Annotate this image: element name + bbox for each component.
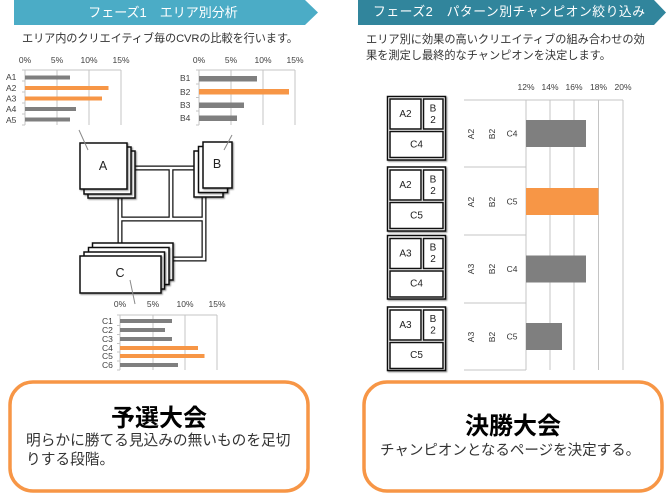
combination card: A3 B2 C4: A3 [399,248,412,260]
connector pipes between areas [120,168,204,259]
bar group: A3 B2 C4 [466,256,586,282]
bar chart: area A: A1 [6,72,17,82]
bar chart: area B: 15% [286,55,304,65]
creative stack A [80,143,135,198]
leader line: stack C to chart C [130,280,135,304]
bar chart: area A: 0% [19,55,32,65]
description: phase 2 [366,32,645,62]
combination card: A3 B2 C5: C5 [410,350,423,361]
bar chart: area C: C6 [102,360,113,370]
callout: preliminary round: りする段階。 [26,451,114,468]
combination card: A2 B2 C5 [388,167,446,231]
bar chart: area B: B2 [180,87,191,97]
bar chart: area A: A2 [6,83,17,93]
bar chart: area A: A5 [6,115,17,125]
bar group: A2 B2 C4 [466,120,586,147]
bar group: A3 B2 C5: B2 [487,332,497,342]
bar chart: area B: 0% [193,55,206,65]
creative stack C [80,243,173,293]
bar chart: area C: C5 [102,351,113,361]
bar chart: area C: C1 [102,316,113,326]
bar group: A2 B2 C5: C5 [507,196,518,206]
callout: preliminary round: 予選大会 [111,405,207,432]
bar chart: area C [102,299,226,370]
combination card: A3 B2 C4 [388,236,446,299]
combination card: A2 B2 C5: B [430,174,437,186]
bar group: A2 B2 C4: C4 [507,128,518,138]
bar group: A3 B2 C5 [466,323,562,350]
combination card: A3 B2 C4: B [430,242,437,254]
bar chart: area A: A3 [6,94,17,104]
combination card: A2 B2 C4 [388,96,446,160]
bar group: A2 B2 C5 [466,188,598,215]
bar chart: area A: 5% [51,55,64,65]
bar chart: pattern comparison: 14% [541,82,559,92]
bar group: A2 B2 C4: A2 [466,129,476,139]
bar group: A3 B2 C4: B2 [487,264,497,274]
description: phase 1: エリア内のクリエイティブ毎のCVRの比較を行います。 [22,31,298,45]
bar chart: area A: 15% [112,55,130,65]
header arrow: phase 1: フェーズ1 エリア別分析 [88,5,238,20]
bar chart: area B [180,55,304,125]
bar chart: area B: B4 [180,113,191,123]
combination card: A3 B2 C5 [388,307,446,370]
combination card: A3 B2 C5: A3 [399,320,412,331]
bar chart: area B: 5% [225,55,238,65]
creative stack B [194,142,232,197]
description: phase 2: エリア別に効果の高いクリエイティブの組み合わせの効 [366,32,645,46]
bar chart: pattern comparison: 16% [565,82,583,92]
bar chart: pattern comparison: 20% [614,82,632,92]
combination card: A3 B2 C4: C4 [410,278,423,290]
bar group: A2 B2 C5: B2 [487,197,497,207]
callout: preliminary round: 明らかに勝てる見込みの無いものを足切 [26,432,290,449]
bar group: A2 B2 C5: A2 [466,197,476,207]
bar chart: area B: 10% [254,55,272,65]
bar group: A3 B2 C4: C4 [507,264,518,274]
callout: final round [364,382,662,491]
header arrow: phase 1 [14,0,318,25]
combination card: A2 B2 C4: C4 [410,140,423,150]
callout: final round: チャンピオンとなるページを決定する。 [380,442,640,459]
bar chart: area A: A4 [6,104,17,114]
combination card: A2 B2 C5: 2 [430,186,436,197]
bar chart: area C: 15% [208,299,226,309]
callout: preliminary round [10,382,308,491]
bar chart: area A: 10% [80,55,98,65]
creative stack B: B [213,157,221,171]
combination card: A2 B2 C5: C5 [410,210,423,222]
bar group: A3 B2 C4: A3 [466,264,476,274]
bar group: A3 B2 C5: A3 [466,332,476,342]
leader line: chart A to stack A [79,130,88,150]
bar chart: pattern comparison: 12% [517,82,535,92]
bar chart: area C: 10% [176,299,194,309]
bar chart: pattern comparison [464,82,632,370]
bar group: A2 B2 C4: B2 [487,129,497,139]
bar chart: area C: 5% [147,299,160,309]
combination card: A2 B2 C4: B [430,104,437,114]
combination card: A3 B2 C5: B [430,314,437,325]
callout: final round: 決勝大会 [465,413,561,440]
combination card: A3 B2 C4: 2 [430,254,436,265]
description: phase 2: 果を測定し最終的なチャンピオンを決定します。 [366,48,611,62]
leader line: chart B to stack B [224,135,232,150]
bar chart: area B: B3 [180,100,191,110]
bar chart: area C: C4 [102,343,113,353]
bar chart: area C: C2 [102,325,113,335]
bar group: A3 B2 C5: C5 [507,332,518,342]
creative stack C: C [115,266,125,280]
combination card: A2 B2 C4: A2 [399,109,412,120]
combination card: A3 B2 C5: 2 [430,326,436,336]
header arrow: phase 2 [358,0,666,25]
bar chart: area C: C3 [102,334,113,344]
creative stack A: A [99,159,108,173]
bar chart: pattern comparison: 18% [590,82,607,92]
bar chart: area A [6,55,130,125]
combination card: A2 B2 C5: A2 [399,180,412,191]
bar chart: area C: 0% [114,299,127,309]
combination card: A2 B2 C4: 2 [430,115,436,126]
header arrow: phase 2: フェーズ2 パターン別チャンピオン絞り込み [373,4,645,19]
bar chart: area B: B1 [180,73,191,83]
